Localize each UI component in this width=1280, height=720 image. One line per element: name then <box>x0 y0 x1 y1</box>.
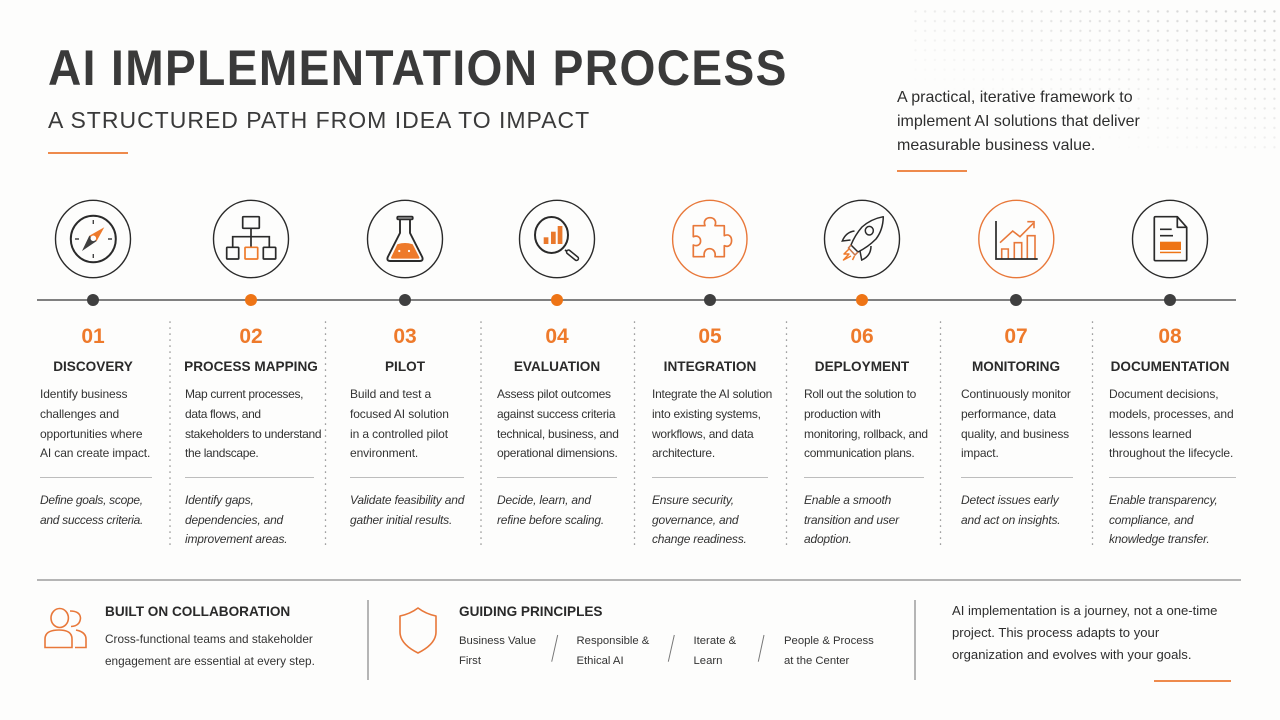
text: dependencies, and <box>185 513 283 527</box>
text: impact. <box>961 446 999 460</box>
text: Enable a smooth <box>804 493 891 507</box>
icon: shield <box>399 607 437 654</box>
text: performance, data <box>961 407 1056 421</box>
text: 06 <box>850 325 874 348</box>
subtitle: A STRUCTURED PATH FROM IDEA TO IMPACT <box>48 107 590 133</box>
text: Roll out the solution to <box>804 387 916 401</box>
text: and success criteria. <box>40 513 143 527</box>
text: AI can create impact. <box>40 446 150 460</box>
closing note <box>952 603 1217 662</box>
text: technical, business, and <box>497 427 619 441</box>
step 05 <box>652 325 772 546</box>
text: Assess pilot outcomes <box>497 387 611 401</box>
icon: people <box>44 608 87 648</box>
text: DEPLOYMENT <box>815 359 909 374</box>
text: focused AI solution <box>350 407 449 421</box>
intro text: measurable business value. <box>897 137 1095 154</box>
text: Build and test a <box>350 387 431 401</box>
text: adoption. <box>804 532 852 546</box>
icon: compass <box>54 200 132 278</box>
text: operational dimensions. <box>497 446 618 460</box>
closing note: AI implementation is a journey, not a one-time <box>952 603 1217 618</box>
text: PROCESS MAPPING <box>184 359 318 374</box>
text: improvement areas. <box>185 532 287 546</box>
text: Detect issues early <box>961 493 1059 507</box>
step 08 <box>1109 325 1236 546</box>
text: lessons learned <box>1109 427 1192 441</box>
intro accent rule <box>897 170 967 172</box>
text: EVALUATION <box>514 359 600 374</box>
text: governance, and <box>652 513 738 527</box>
principle slashes <box>551 634 764 662</box>
text: 07 <box>1004 325 1028 348</box>
text: PILOT <box>385 359 425 374</box>
text: environment. <box>350 446 418 460</box>
panel: collaboration <box>105 604 315 668</box>
panel: guiding principles: Responsible & <box>576 635 649 647</box>
icon: rocket <box>824 200 900 278</box>
text: workflows, and data <box>652 427 754 441</box>
decorative dot pattern <box>914 10 1276 148</box>
text: 03 <box>393 325 417 348</box>
text: challenges and <box>40 407 119 421</box>
text: Integrate the AI solution <box>652 387 772 401</box>
text: Identify gaps, <box>185 493 254 507</box>
text: opportunities where <box>40 427 142 441</box>
text: DISCOVERY <box>53 359 133 374</box>
text: stakeholders to understand <box>185 427 321 441</box>
icon: process map <box>212 200 290 278</box>
panel: guiding principles <box>459 604 874 667</box>
text: 02 <box>239 325 263 348</box>
panel: collaboration: Cross-functional teams and stakeholder <box>105 632 313 646</box>
text: against success criteria <box>497 407 615 421</box>
panel: collaboration: engagement are essential at every step. <box>105 654 315 668</box>
text: 05 <box>698 325 722 348</box>
text: communication plans. <box>804 446 914 460</box>
icon: puzzle piece <box>672 200 748 278</box>
text: monitoring, rollback, and <box>804 427 928 441</box>
text: DOCUMENTATION <box>1111 359 1229 374</box>
step 02 <box>184 325 321 546</box>
text: refine before scaling. <box>497 513 604 527</box>
text: quality, and business <box>961 427 1069 441</box>
text: 04 <box>545 325 569 348</box>
icon: document <box>1132 200 1208 278</box>
text: production with <box>804 407 881 421</box>
text: in a controlled pilot <box>350 427 448 441</box>
panel: guiding principles: Iterate & <box>694 635 736 647</box>
intro text: A practical, iterative framework to <box>897 89 1133 106</box>
panel: guiding principles: at the Center <box>784 655 849 667</box>
text: 08 <box>1158 325 1182 348</box>
panel: guiding principles: First <box>459 655 481 667</box>
text: into existing systems, <box>652 407 761 421</box>
text: data flows, and <box>185 407 261 421</box>
text: 01 <box>81 325 105 348</box>
icon: magnifier with bars <box>518 200 596 278</box>
text: MONITORING <box>972 359 1060 374</box>
text: transition and user <box>804 513 899 527</box>
panel: guiding principles: Business Value <box>459 635 536 647</box>
step 04 <box>497 325 619 527</box>
text: and act on insights. <box>961 513 1060 527</box>
closing note: project. This process adapts to your <box>952 625 1159 640</box>
text: Enable transparency, <box>1109 493 1218 507</box>
panel: guiding principles: Ethical AI <box>576 655 624 667</box>
text: Ensure security, <box>652 493 734 507</box>
text: Decide, learn, and <box>497 493 591 507</box>
step 01 <box>40 325 152 527</box>
panel divider <box>367 600 368 680</box>
timeline markers <box>87 294 1176 306</box>
text: Define goals, scope, <box>40 493 143 507</box>
icon: growth chart <box>978 200 1054 278</box>
closing note: organization and evolves with your goals. <box>952 647 1191 662</box>
panel: guiding principles: People & Process <box>784 635 874 647</box>
text: Continuously monitor <box>961 387 1071 401</box>
closing accent rule <box>1154 680 1231 682</box>
title: AI IMPLEMENTATION PROCESS <box>48 40 788 96</box>
text: Document decisions, <box>1109 387 1218 401</box>
text: the landscape. <box>185 446 258 460</box>
text: gather initial results. <box>350 513 452 527</box>
text: knowledge transfer. <box>1109 532 1209 546</box>
panel: collaboration: BUILT ON COLLABORATION <box>105 604 290 619</box>
text: INTEGRATION <box>664 359 756 374</box>
panel divider <box>914 600 916 680</box>
text: Map current processes, <box>185 387 303 401</box>
text: Identify business <box>40 387 127 401</box>
text: compliance, and <box>1109 513 1193 527</box>
step 03 <box>350 325 465 527</box>
bottom divider <box>37 579 1241 580</box>
text: change readiness. <box>652 532 747 546</box>
timeline line <box>37 299 1236 301</box>
intro text: implement AI solutions that deliver <box>897 113 1140 130</box>
text: models, processes, and <box>1109 407 1234 421</box>
panel: guiding principles: GUIDING PRINCIPLES <box>459 604 603 619</box>
panel: guiding principles: Learn <box>694 655 722 667</box>
intro text <box>897 89 1140 154</box>
text: architecture. <box>652 446 715 460</box>
text: Validate feasibility and <box>350 493 464 507</box>
title accent rule <box>48 152 128 154</box>
text: throughout the lifecycle. <box>1109 446 1233 460</box>
step 06 <box>804 325 928 546</box>
icon: flask <box>366 200 444 278</box>
step 07 <box>961 325 1073 527</box>
column separators <box>169 321 1094 545</box>
